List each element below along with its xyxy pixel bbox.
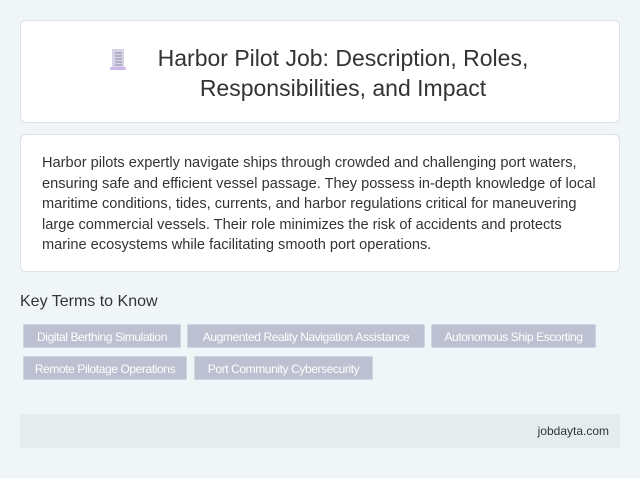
tag 5: Port Community Cybersecurity [208,362,359,376]
description text: Harbor pilots expertly navigate ships through crowded and challenging port waters, ensuring safe and efficient vessel passage. They possess in-depth knowledge of local maritime conditions, tides, currents, and harbor regulations critical for maneuvering large commercial vessels. Their role minimizes the risk of accidents and protects marine ecosystems while facilitating smooth port operations. [42,155,596,253]
tag 4 [23,356,187,380]
tag 3: Autonomous Ship Escorting [444,330,583,344]
tag 2: Augmented Reality Navigation Assistance [203,330,409,344]
description card [20,134,620,272]
heading: key terms: Key Terms to Know [20,293,158,310]
title: Harbor Pilot Job: Description, Roles, Responsibilities, and Impact [158,45,528,101]
tag 4: Remote Pilotage Operations [35,362,175,376]
tag 1: Digital Berthing Simulation [37,330,167,344]
tag 1 [23,324,181,348]
icon: scroll [110,49,126,70]
tag 3 [431,324,596,348]
header card [20,20,620,123]
tag 5 [194,356,373,380]
tag 2 [187,324,425,348]
footer text: jobdayta.com [538,424,609,438]
footer [20,414,620,448]
